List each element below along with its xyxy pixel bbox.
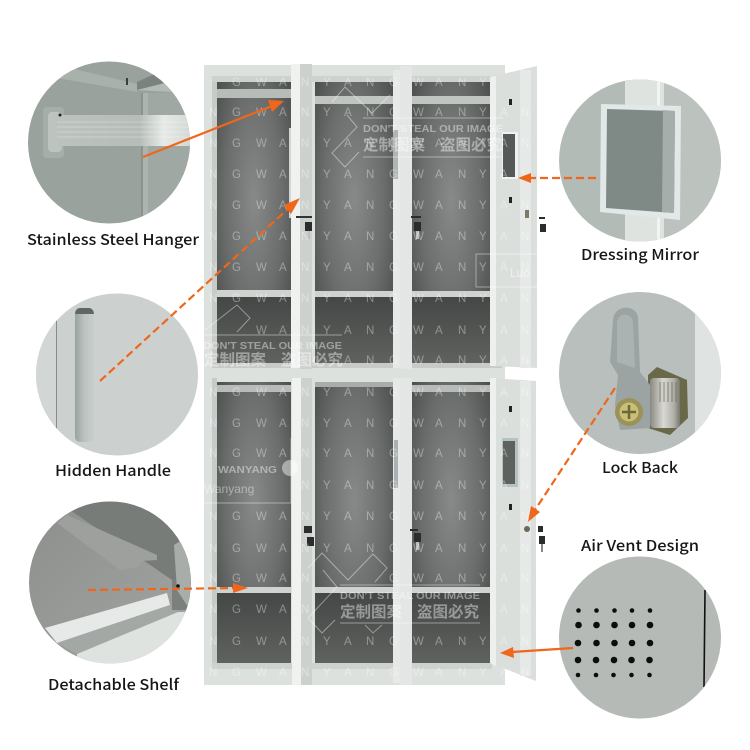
upper open door: [490, 66, 537, 368]
label: Air Vent Design: [581, 535, 699, 556]
detail photo: vent holes: [559, 556, 721, 719]
arrow: dressing mirror: [518, 173, 596, 183]
watermark: Luo box: [476, 254, 537, 287]
detail photo: hanger rail: [28, 61, 198, 224]
watermark letter grid: ANGWANYAN: [344, 355, 529, 367]
detail photo: cam lock: [559, 292, 721, 454]
label: Detachable Shelf: [48, 674, 180, 695]
watermark letter grid: NGWANYANGWANYAN: [209, 667, 529, 679]
watermark letter grid: NGWANYANGWANYAN: [209, 511, 529, 523]
label: Dressing Mirror: [581, 244, 700, 265]
arrow: air vent: [500, 647, 573, 658]
watermark: Luo box: Luo: [510, 266, 530, 280]
arrow: lock back: [528, 388, 615, 522]
watermark: lower centre: [308, 553, 480, 633]
watermark letter grid: GWANYANGWANY: [232, 77, 487, 89]
lower cabinet body: [204, 377, 505, 685]
panel: stainless steel hanger: [27, 61, 200, 250]
detail photo: shelf corner: [29, 500, 191, 664]
watermark letter grid: NGWANYANGWANYAN: [209, 200, 529, 212]
watermark letter grid: [209, 77, 529, 679]
watermark letter grid: NGWANYANGWANYAN: [209, 387, 529, 399]
watermark: lower centre: 盗图必究: [417, 602, 480, 621]
watermark letter grid: NGWANYANGWANYAN: [209, 107, 529, 119]
watermark: middle left: [203, 305, 344, 369]
watermark: Wanyang box: Wanyang: [204, 482, 254, 496]
watermark letter grid: NGWANAN: [209, 604, 529, 616]
watermark: lower centre: DON'T STEAL OUR IMAGE: [340, 590, 480, 602]
watermark letter grid: NGWANYANGWANYAN: [209, 138, 529, 150]
watermark: middle left: DON'T STEAL OUR IMAGE: [203, 340, 342, 352]
watermark: lower centre: 定制图案: [340, 602, 403, 621]
panel: lock back: [559, 292, 721, 478]
watermark letter grid: NYANGWANYAN: [301, 480, 529, 492]
watermark letter grid: NGWANYANGWANYAN: [209, 543, 529, 555]
watermark: Wanyang box: WANYANG: [218, 464, 277, 476]
panel: hidden handle: [36, 293, 198, 481]
watermark: upper centre: [332, 87, 503, 167]
locker cabinet: [203, 64, 546, 685]
watermark letter grid: NGWANGWANYAN: [209, 573, 529, 585]
detail photo: recessed handle: [36, 293, 198, 456]
upper cabinet body: [204, 64, 505, 377]
panel: air vent design: [559, 535, 721, 719]
icon: lower door mirror: [502, 438, 518, 487]
watermark: upper centre: 定制图案: [363, 135, 426, 154]
watermark letter grid: NGWANYANGWANYAN: [209, 169, 529, 181]
lower open door: [490, 378, 536, 681]
watermark: upper centre: 盗图必究: [440, 135, 503, 154]
watermark letter grid: NGWANYANGWANYAN: [209, 418, 529, 430]
detail photo: mirror: [559, 79, 721, 242]
arrow: hanger: [143, 100, 284, 157]
watermark: Wanyang box: [204, 438, 298, 503]
label: Hidden Handle: [55, 460, 171, 481]
label: Lock Back: [602, 457, 678, 478]
watermark letter grid: WANYANGWANYAN: [256, 325, 529, 337]
watermark: upper centre: DON'T STEAL OUR IMAGE: [363, 123, 503, 135]
icon: padlocks and keys: [296, 210, 546, 552]
arrow: hidden handle: [100, 198, 300, 381]
panel: detachable shelf: [29, 500, 191, 695]
panel: dressing mirror: [559, 79, 721, 265]
watermark letter grid: NGWANYANGWANYAN: [209, 293, 529, 305]
watermark letter grid: NGWANYANGWANYAN: [209, 262, 529, 274]
watermark letter grid: NGWANYANGWANYAN: [209, 231, 529, 243]
watermark: middle left: 定制图案: [204, 350, 267, 369]
arrow: detachable shelf: [88, 583, 248, 593]
label: Stainless Steel Hanger: [27, 229, 200, 250]
watermark letter grid: NGWANYANGWANYAN: [209, 636, 529, 648]
icon: upper door mirror: [502, 132, 518, 179]
watermark: middle left: 盗图必究: [281, 350, 344, 369]
watermark letter grid: NGWANYANGWANYAN: [209, 448, 529, 460]
